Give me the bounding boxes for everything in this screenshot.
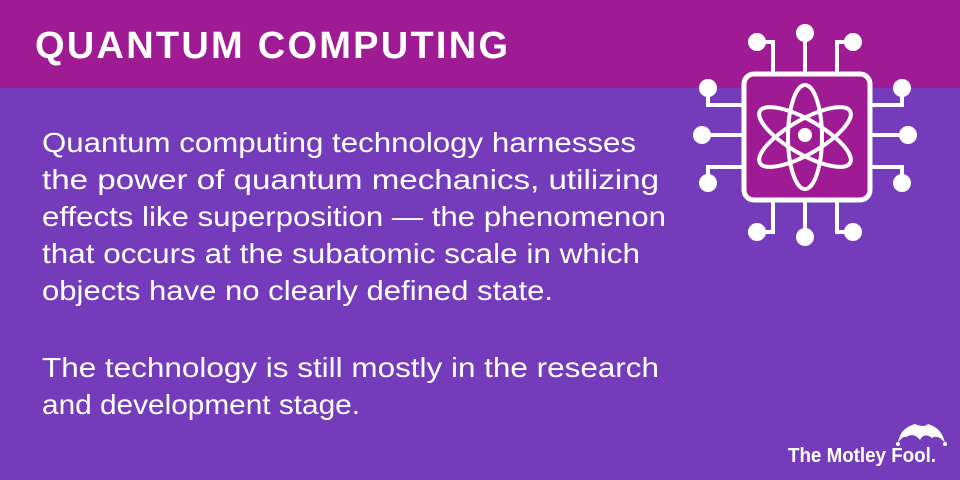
paragraph 1: the power of quantum mechanics, utilizing [42, 164, 659, 195]
paragraph 1: that occurs at the subatomic scale in which [42, 238, 640, 269]
pins [693, 24, 917, 246]
atom [751, 85, 859, 189]
title: QUANTUM COMPUTING [35, 25, 510, 67]
logo: The Motley Fool [788, 424, 947, 467]
header band [0, 0, 960, 88]
paragraph 1 [42, 127, 666, 306]
paragraph 1: Quantum computing technology harnesses [42, 127, 636, 158]
icon: jester hat [896, 424, 947, 446]
paragraph 2: and development stage. [42, 389, 360, 420]
paragraph 1: objects have no clearly defined state. [42, 275, 553, 306]
chip body [744, 74, 870, 200]
paragraph 1: effects like superposition — the phenomenon [42, 201, 666, 232]
logo: The Motley Fool: The Motley Fool. [788, 445, 936, 467]
paragraph 2: The technology is still mostly in the research [42, 352, 659, 383]
icon: quantum chip [693, 24, 917, 246]
paragraph 2 [42, 352, 659, 420]
